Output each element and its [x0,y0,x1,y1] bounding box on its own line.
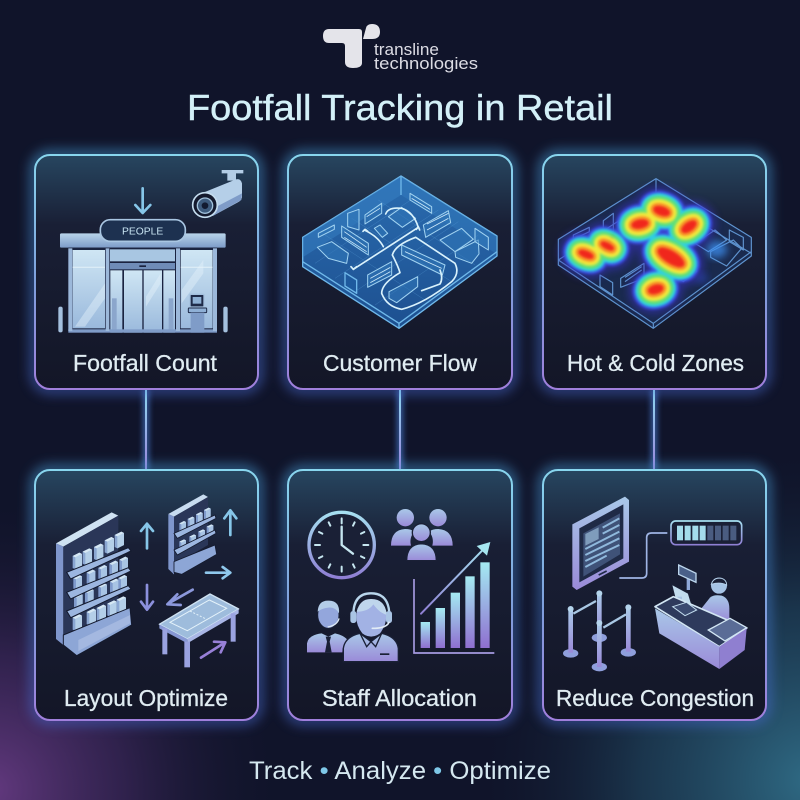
large shelf [56,512,132,656]
icon: tablet display [572,497,629,590]
storefront body [68,248,217,333]
kiosk [188,294,207,333]
shelf lines [344,198,448,283]
icon: group of people [391,509,453,561]
floor outline [558,179,751,328]
logo wordmark [374,40,478,73]
people sign [100,220,185,241]
icon: bar chart with arrow [414,542,494,653]
connector: customer flow to staff allocation [399,389,401,470]
icons: clock, team, staff, chart [307,509,494,662]
card glows [35,155,766,720]
connector glows [143,389,657,470]
title: Footfall Tracking in Retail [187,87,613,128]
icons: shelves, table and arrows [56,494,239,667]
icon: storefront with camera [58,170,243,333]
label: layout optimize: Layout Optimize [64,685,228,711]
icons: display, capacity bar, stanchions, checkout [563,497,747,671]
panel: hot and cold zones [543,155,766,389]
customer flow paths [351,208,457,309]
label: reduce congestion: Reduce Congestion [556,685,754,711]
connector line [619,533,667,578]
shelving units [317,193,488,303]
logo wordmark: technologies [374,54,478,73]
logo: transline technologies [323,24,478,73]
label: footfall count: Footfall Count [73,350,218,376]
people sign: PEOPLE [122,227,163,238]
isometric store floor plan [303,176,497,328]
tagline: Track • Analyze • Optimize [249,757,551,785]
label: hot and cold zones: Hot & Cold Zones [567,350,744,376]
arrows [141,510,236,658]
icon: female staff with headset [343,593,398,662]
small shelf [168,494,217,574]
storefront roof [60,233,226,248]
table [159,594,239,667]
floor grid [315,195,478,305]
logo mark [323,24,380,68]
icon: clock [309,512,374,578]
panel: customer flow [288,155,512,389]
heat blobs [579,206,727,294]
panel: layout optimize [35,470,258,720]
posts [58,307,228,332]
floor and walls [303,176,497,328]
icon: male staff [307,601,348,652]
label: staff allocation: Staff Allocation [322,685,477,711]
label: customer flow: Customer Flow [323,350,477,376]
panel: footfall count [35,155,258,389]
logo wordmark: transline [374,40,439,59]
heatmap floor plan [558,179,751,328]
icon: queue stanchions [563,590,636,671]
connector: hot and cold zones to reduce congestion [653,389,655,470]
panel: reduce congestion [543,470,766,720]
panel: staff allocation [288,470,512,720]
connector: footfall count to layout optimize [145,389,147,470]
icon: security camera [193,170,243,217]
icon: down arrow [135,188,150,213]
icon: checkout desk with cashier [655,565,747,669]
icon: capacity bar [671,521,742,545]
